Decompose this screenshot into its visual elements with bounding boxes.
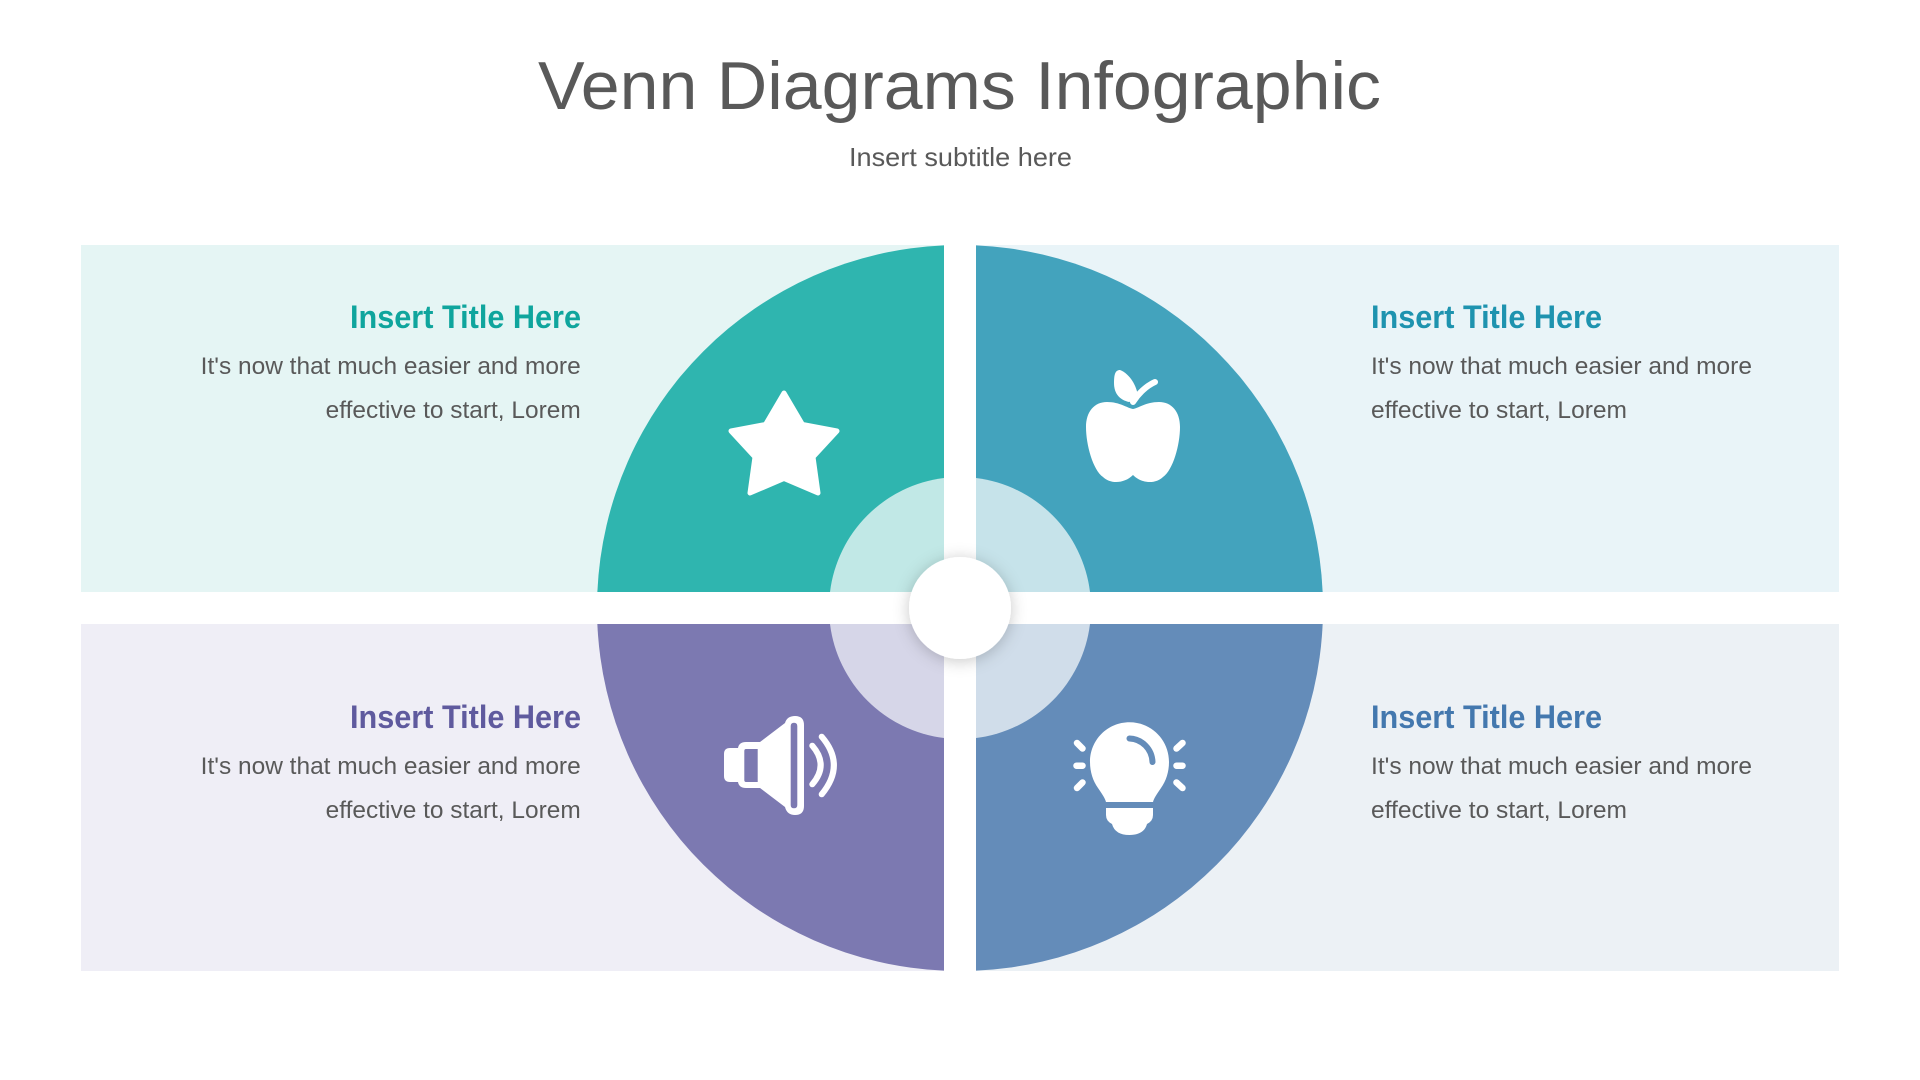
panel: top left xyxy=(81,245,944,592)
heading: Insert Title Here xyxy=(1371,299,1602,335)
body text: It's now that much easier and more xyxy=(201,353,581,380)
body text line 2: effective to start, Lorem xyxy=(326,797,581,824)
icon: star xyxy=(731,393,837,493)
inner quarter circle xyxy=(976,624,1090,738)
inner quarter circle xyxy=(830,624,944,738)
icon: apple xyxy=(1086,370,1180,482)
panel: bottom left xyxy=(81,624,944,971)
panel background xyxy=(976,245,1839,592)
panel background xyxy=(81,245,944,592)
body text line 2: effective to start, Lorem xyxy=(326,397,581,424)
quarter circle xyxy=(597,624,944,971)
quarter circle xyxy=(976,624,1323,971)
heading: Insert Title Here xyxy=(350,299,581,335)
quarter circle xyxy=(597,245,944,592)
body text line 2: effective to start, Lorem xyxy=(1371,397,1627,424)
inner quarter circle xyxy=(830,478,944,592)
body text line 2: effective to start, Lorem xyxy=(1371,797,1627,824)
icon: light bulb xyxy=(1076,722,1182,835)
center circle xyxy=(909,557,1011,659)
panel background xyxy=(976,624,1839,971)
heading: Insert Title Here xyxy=(350,699,581,735)
panel: top right xyxy=(976,245,1839,592)
quarter circle xyxy=(976,245,1323,592)
icon: speaker xyxy=(724,716,834,815)
panel: bottom right xyxy=(976,624,1839,971)
body text: It's now that much easier and more xyxy=(1371,753,1752,780)
body text: It's now that much easier and more xyxy=(201,753,581,780)
title: Venn Diagrams Infographic xyxy=(538,48,1381,124)
panel background xyxy=(81,624,944,971)
heading: Insert Title Here xyxy=(1371,699,1602,735)
inner quarter circle xyxy=(976,478,1090,592)
subtitle: Insert subtitle here xyxy=(849,142,1072,172)
body text: It's now that much easier and more xyxy=(1371,353,1752,380)
